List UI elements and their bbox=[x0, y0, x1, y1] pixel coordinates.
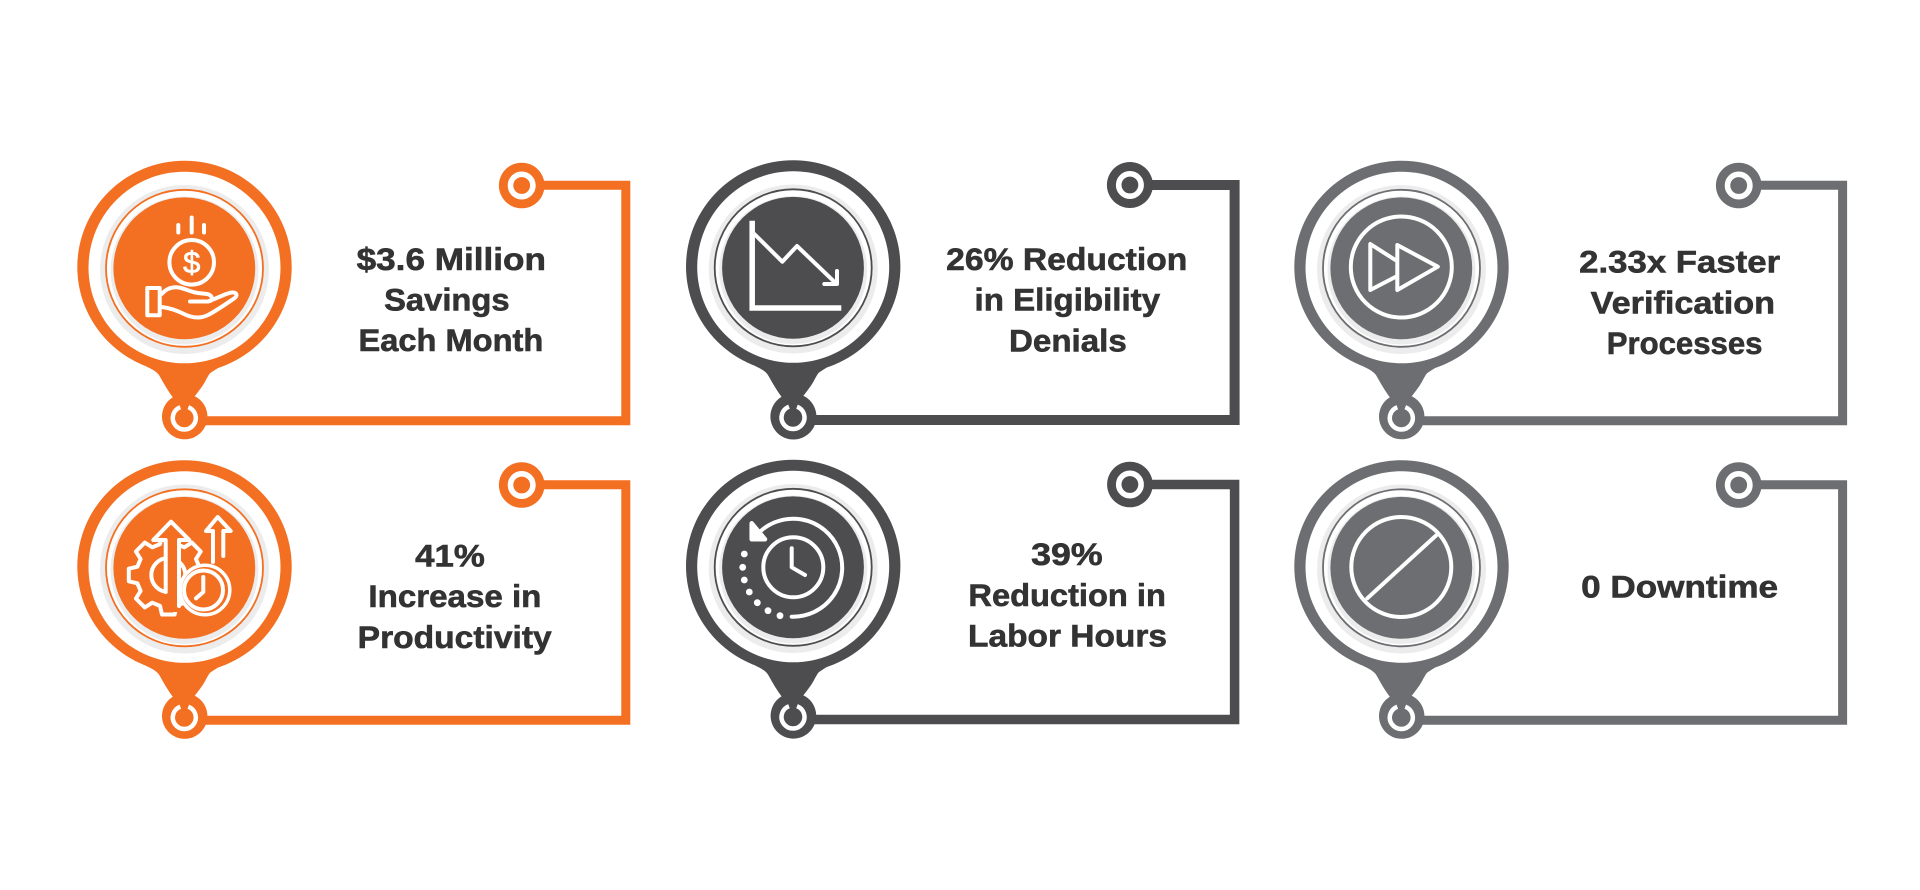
text: denials: Denials bbox=[1009, 323, 1127, 359]
text: downtime: 0 Downtime bbox=[1581, 569, 1778, 605]
text: productivity: Increase in bbox=[368, 578, 541, 614]
pin and frame bbox=[686, 460, 1235, 739]
text: denials: in Eligibility bbox=[974, 282, 1161, 318]
text: productivity: 41% bbox=[415, 538, 485, 574]
panel: 2.33x faster verification processes bbox=[1294, 161, 1843, 439]
text: labor hours: 39% bbox=[1031, 536, 1103, 572]
text: savings: Each Month bbox=[358, 322, 543, 358]
pin and frame bbox=[77, 460, 626, 739]
panel: $3.6 Million savings bbox=[77, 161, 626, 439]
pin and frame bbox=[686, 160, 1235, 439]
text: savings: Savings bbox=[384, 282, 510, 318]
text: labor hours: Reduction in bbox=[968, 577, 1166, 613]
text: denials bbox=[946, 241, 1187, 359]
icon: fast forward bbox=[1351, 216, 1452, 318]
panel: 39% reduction in labor hours bbox=[686, 460, 1235, 739]
text: verification: Verification bbox=[1591, 284, 1775, 320]
text: productivity: Productivity bbox=[358, 619, 552, 655]
icon: hand holding coin: $ bbox=[183, 245, 200, 280]
text: verification: 2.33x Faster bbox=[1579, 244, 1780, 280]
pin and frame bbox=[77, 161, 626, 439]
text: labor hours: Labor Hours bbox=[968, 618, 1167, 654]
icon: zero slash bbox=[1351, 517, 1451, 617]
text: verification bbox=[1579, 244, 1780, 361]
text: productivity bbox=[358, 538, 552, 655]
panel: 26% reduction in eligibility denials bbox=[686, 160, 1235, 439]
text: verification: Processes bbox=[1607, 325, 1762, 361]
panel: 41% increase in productivity bbox=[77, 460, 626, 739]
icon: gear, arrows and clock bbox=[129, 517, 231, 615]
icon: clock with reverse arrow bbox=[739, 519, 842, 619]
panel: 0 downtime bbox=[1294, 460, 1843, 739]
icon: declining chart bbox=[752, 221, 841, 308]
pin and frame bbox=[1294, 460, 1843, 739]
text: denials: 26% Reduction bbox=[946, 241, 1187, 277]
text: savings: $3.6 Million bbox=[357, 241, 546, 277]
pin and frame bbox=[1294, 161, 1843, 439]
text: labor hours bbox=[968, 536, 1167, 654]
text: savings bbox=[357, 241, 546, 358]
icon: hand holding coin bbox=[147, 218, 236, 318]
